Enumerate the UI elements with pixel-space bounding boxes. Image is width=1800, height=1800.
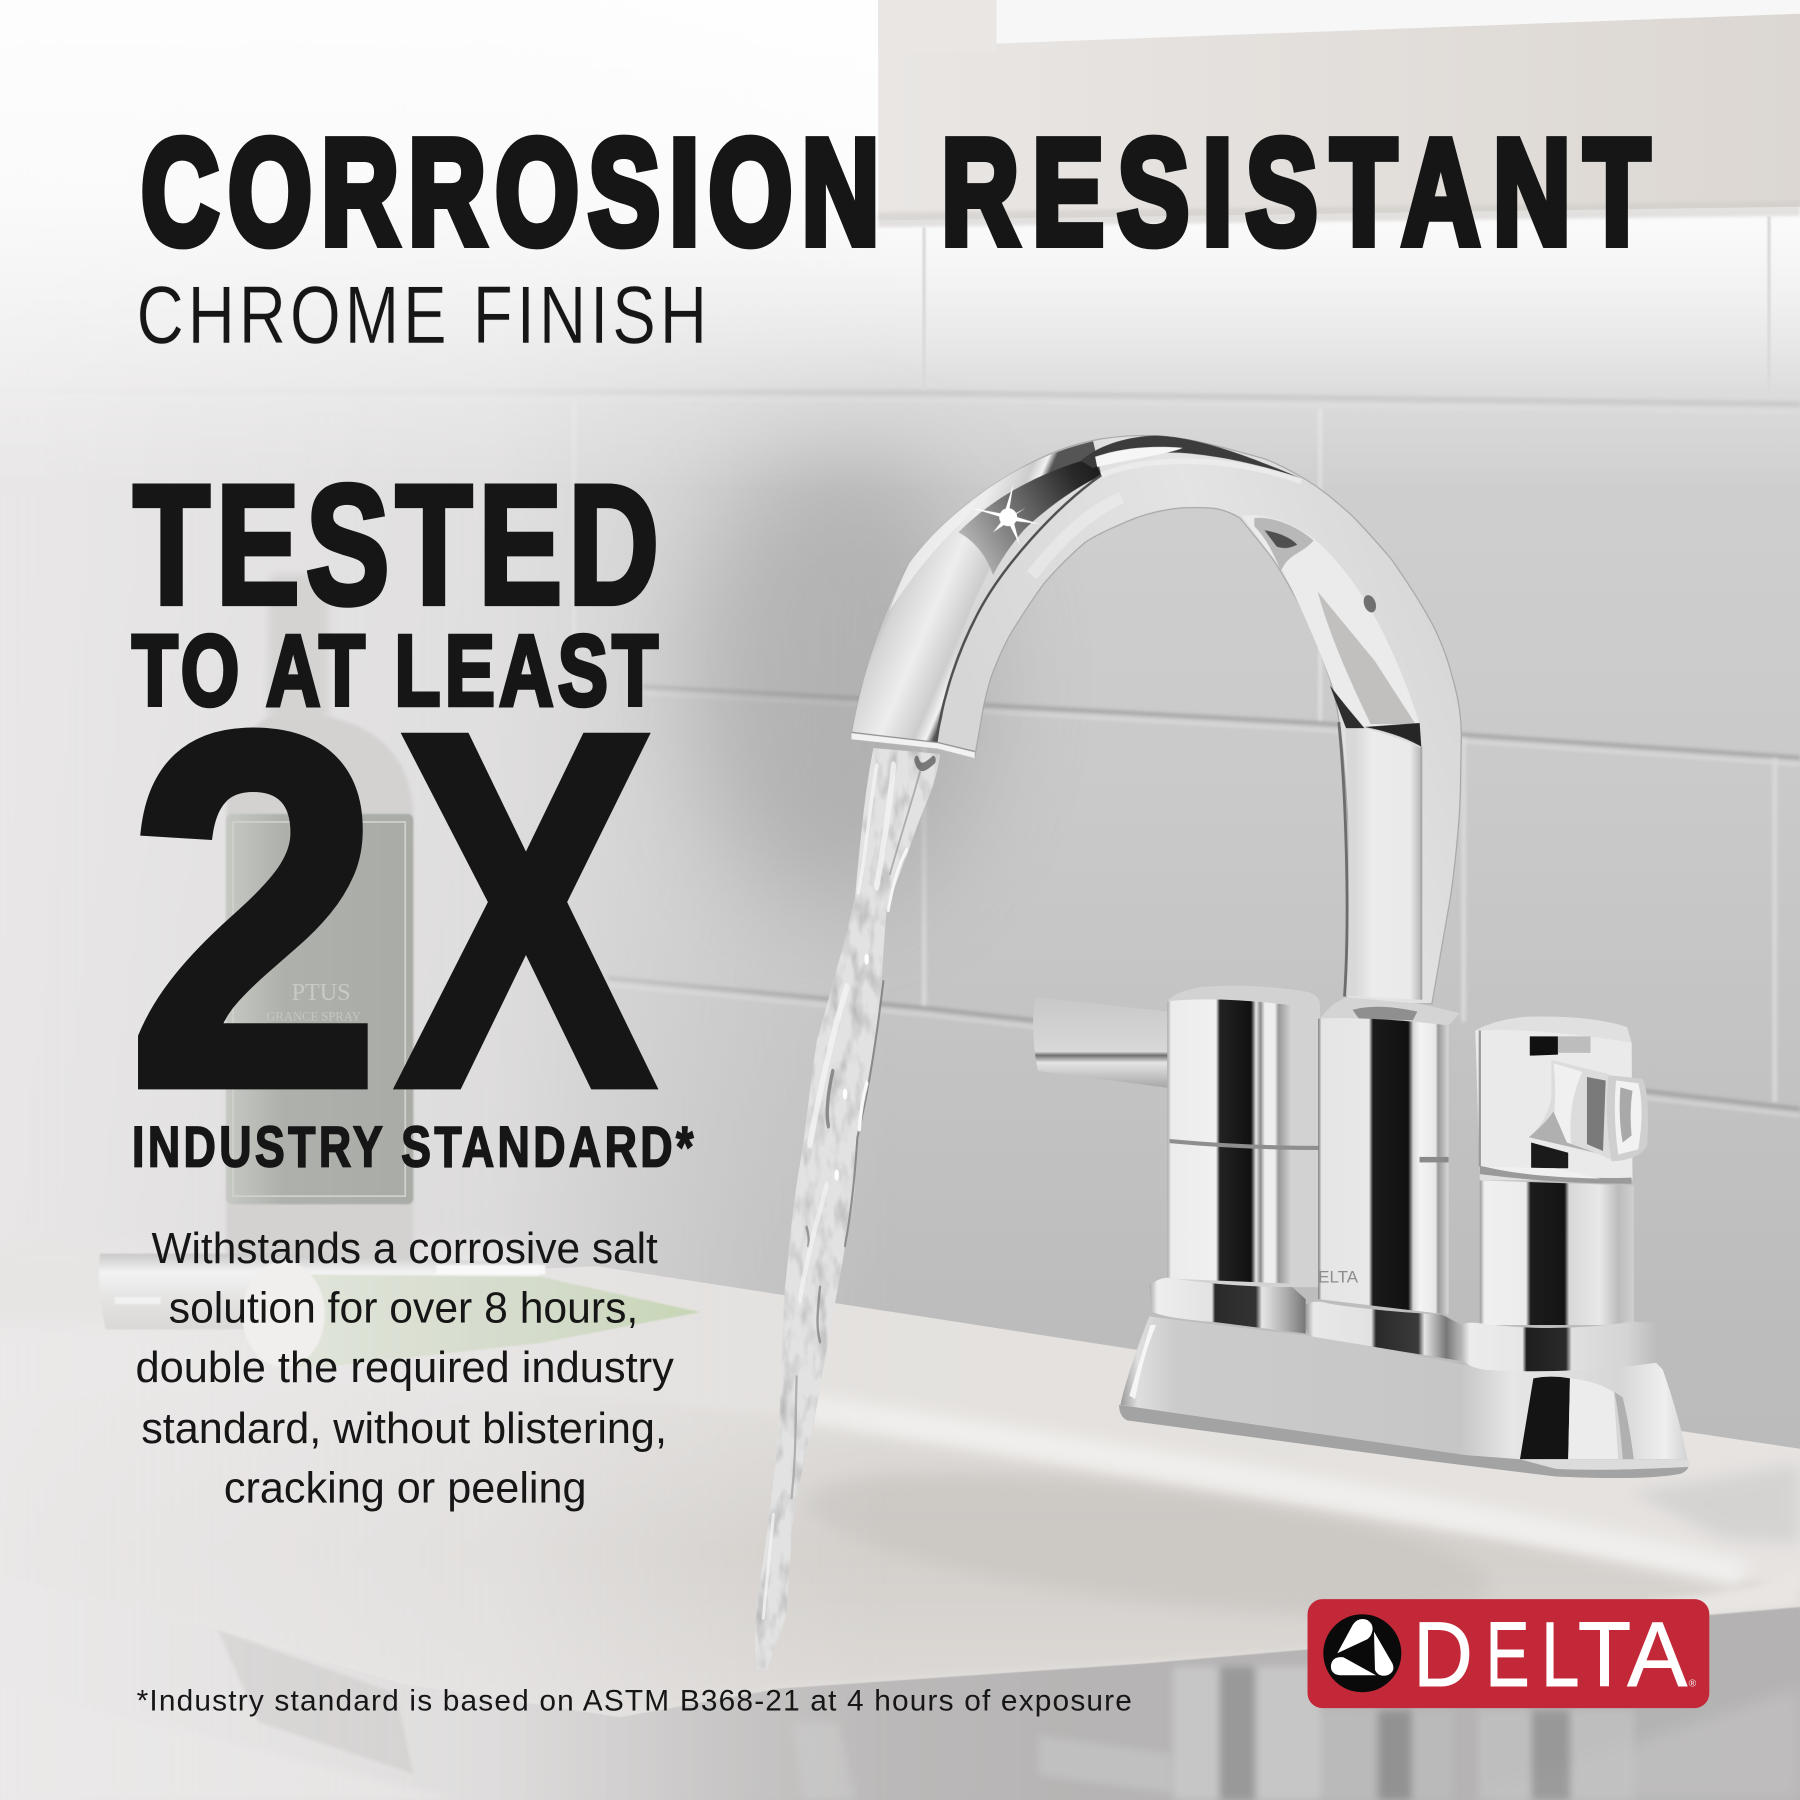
logo wordmark: L xyxy=(1541,1604,1579,1706)
left base ring xyxy=(1149,1278,1306,1334)
subtitle: CHROME FINISH xyxy=(137,269,707,361)
sink counter and basin xyxy=(0,1266,1800,1800)
faucet xyxy=(851,436,1690,1478)
background tube xyxy=(99,1254,700,1367)
sparkle xyxy=(971,483,1040,545)
footnote: *Industry standard is based on ASTM B368-21 at 4 hours of exposure xyxy=(137,1684,1132,1717)
engraved DELTA text: ELTA xyxy=(1318,1268,1359,1287)
logo wordmark: T xyxy=(1578,1603,1631,1705)
stem front xyxy=(1345,728,1422,1000)
registered mark: ® xyxy=(1689,1678,1697,1689)
window sill and frame xyxy=(878,0,1800,396)
big stat: 2X xyxy=(126,628,657,1193)
counter edge softener on left xyxy=(0,1246,517,1326)
top highlight band xyxy=(1081,436,1303,479)
centre cylinder xyxy=(1318,997,1460,1315)
logo wordmark: A xyxy=(1627,1604,1688,1706)
faucet reflection in sink xyxy=(1039,1667,1634,1800)
title xyxy=(141,108,1650,276)
base plate xyxy=(1120,1316,1687,1459)
headline: to at least: TO AT LEAST xyxy=(132,614,658,726)
Delta logo xyxy=(1308,1599,1709,1708)
spout xyxy=(851,436,1461,1004)
top white fade overlay xyxy=(0,0,1800,494)
right base ring xyxy=(1460,1322,1656,1371)
centre base ring xyxy=(1306,1302,1462,1361)
logo icon: delta triangle mark xyxy=(1323,1614,1401,1692)
body text: Withstands a corrosive salt xyxy=(152,1225,658,1273)
logo wordmark: D xyxy=(1413,1603,1473,1706)
front arc face xyxy=(851,441,1101,745)
body text: cracking or peeling xyxy=(224,1465,587,1513)
stray water below sink xyxy=(792,1722,855,1800)
body text: double the required industry xyxy=(135,1344,674,1392)
body text: solution for over 8 hours, xyxy=(169,1284,638,1332)
background bottle: GRANCE SPRAY xyxy=(266,1010,361,1024)
title: CORROSION xyxy=(141,108,879,276)
crease line xyxy=(936,475,1101,743)
left white fade overlay xyxy=(0,0,895,1800)
bottle label text: PTUS xyxy=(292,980,351,1006)
inner bend reflection xyxy=(1242,515,1420,728)
body text: standard, without blistering, xyxy=(141,1405,667,1453)
wall shadow behind spout xyxy=(689,448,987,907)
big stat: 2X: 2 xyxy=(126,629,382,1193)
left cylinder xyxy=(1167,986,1320,1287)
under-sink box ghost xyxy=(218,1630,413,1774)
logo wordmark: E xyxy=(1485,1603,1530,1705)
right cylinder xyxy=(1475,1017,1634,1325)
title: RESISTANT xyxy=(941,108,1650,276)
headline: industry standard: INDUSTRY STANDARD* xyxy=(132,1114,693,1179)
logo wordmark xyxy=(1413,1603,1688,1706)
left lever handle xyxy=(1033,997,1170,1088)
background bottle xyxy=(226,574,413,1268)
big stat: 2X: X xyxy=(396,628,657,1192)
water stream xyxy=(755,748,940,1670)
nozzle rim xyxy=(851,732,975,758)
headline: tested: TESTED xyxy=(133,450,659,640)
base gasket xyxy=(1119,1405,1689,1478)
body text xyxy=(135,1225,674,1513)
upper dark reflection xyxy=(958,458,1101,575)
right lever handle xyxy=(1529,1060,1648,1161)
